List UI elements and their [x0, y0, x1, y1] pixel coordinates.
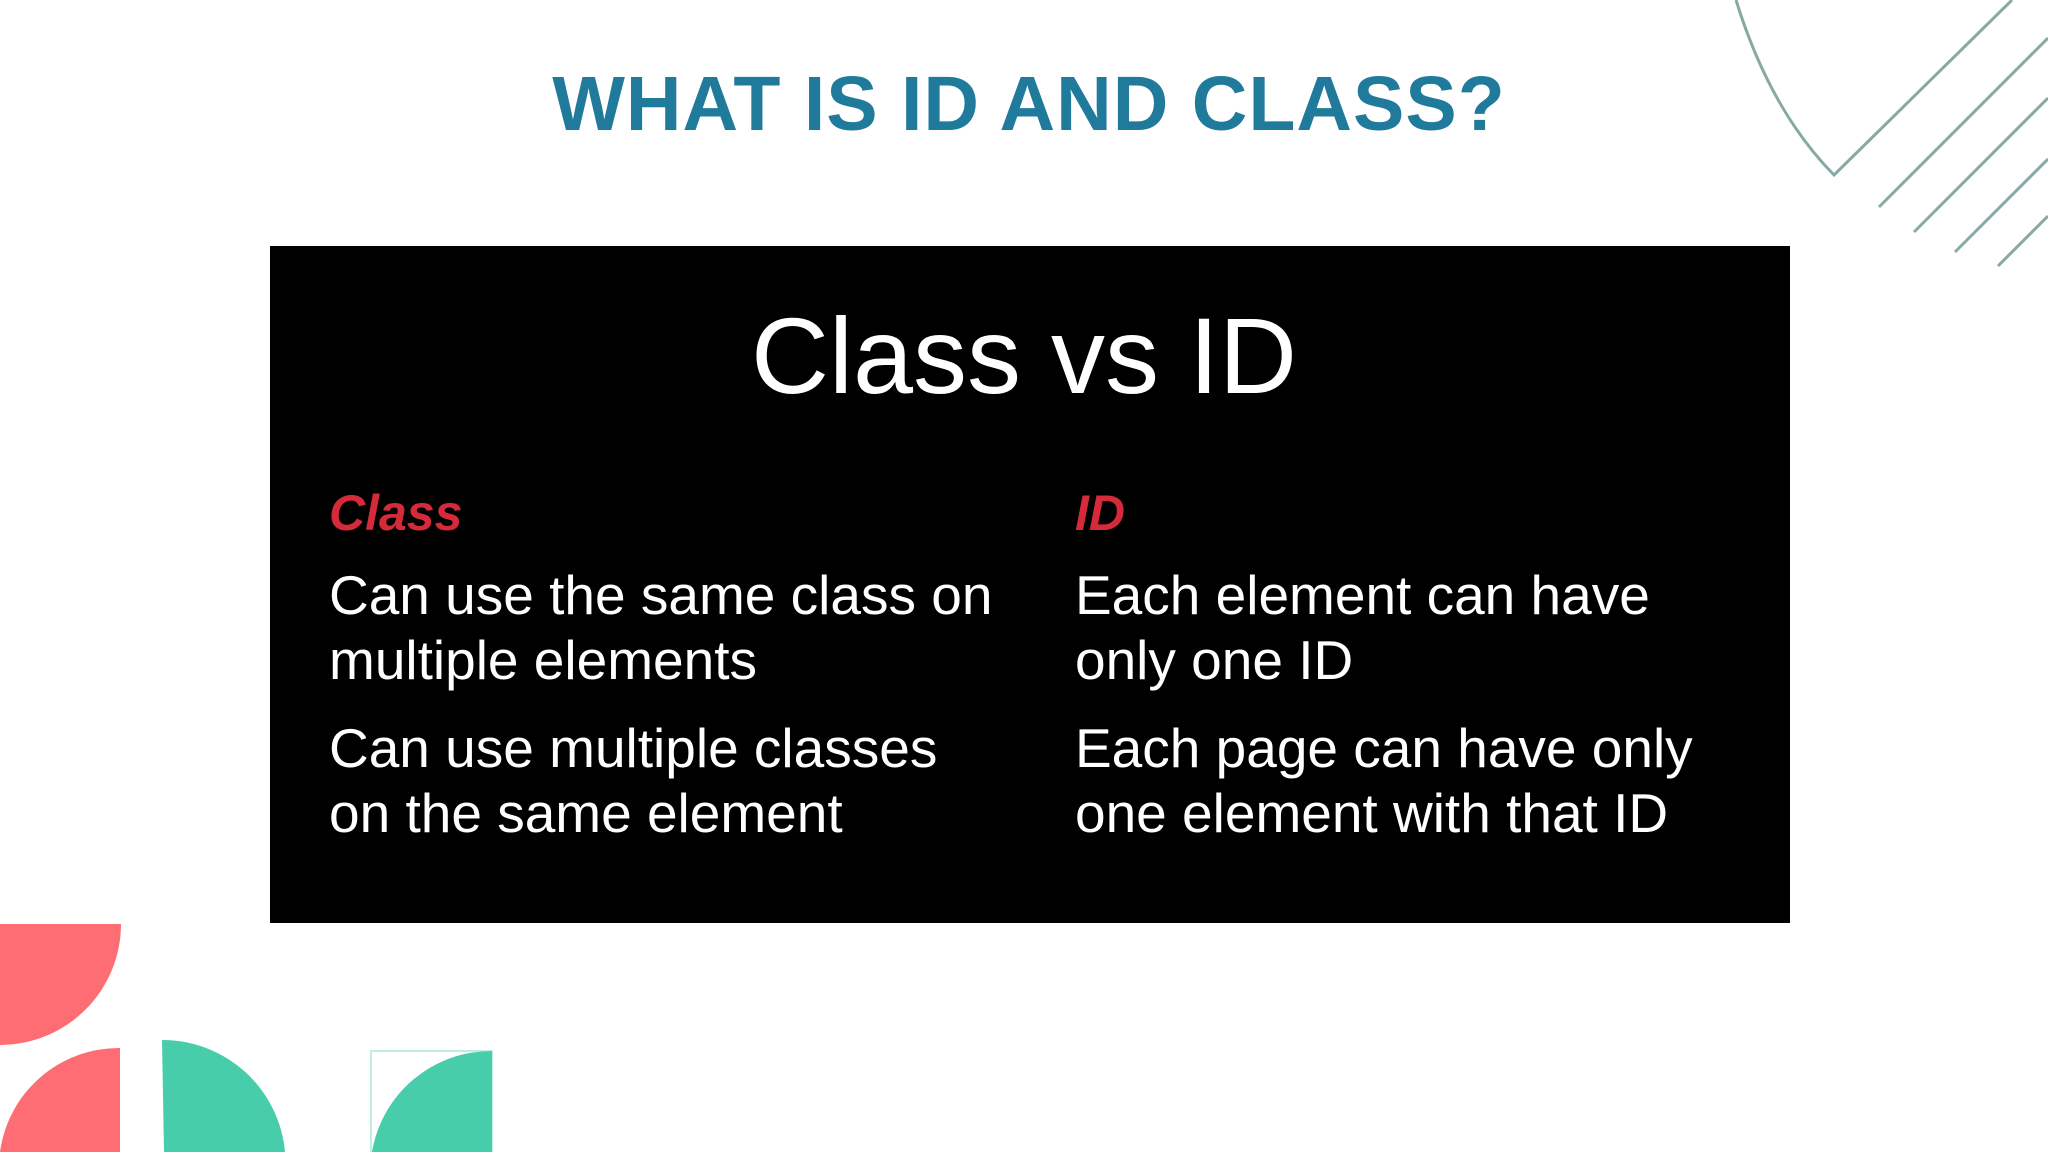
- panel: class vs id: Each element can have: [1075, 564, 1650, 626]
- decoration: top-right line art: [1734, 0, 2048, 267]
- column heading: Class: Class: [329, 485, 462, 541]
- panel: class vs id: on the same element: [329, 782, 843, 844]
- panel heading: Class vs ID: [751, 295, 1297, 416]
- title: WHAT IS ID AND CLASS?: [552, 61, 1506, 147]
- decoration: bottom-left shapes: [0, 924, 493, 1152]
- panel: class vs id: Each page can have only: [1075, 717, 1693, 779]
- text: class points: [329, 564, 992, 844]
- panel: class vs id: only one ID: [1075, 629, 1353, 691]
- panel: class vs id: Can use multiple classes: [329, 717, 937, 779]
- panel: class vs id: multiple elements: [329, 629, 757, 691]
- panel: class vs id: [270, 246, 1790, 923]
- panel: class vs id: Can use the same class on: [329, 564, 992, 626]
- column heading: ID: ID: [1075, 485, 1125, 541]
- panel: class vs id: one element with that ID: [1075, 782, 1668, 844]
- text: id points: [1075, 564, 1693, 844]
